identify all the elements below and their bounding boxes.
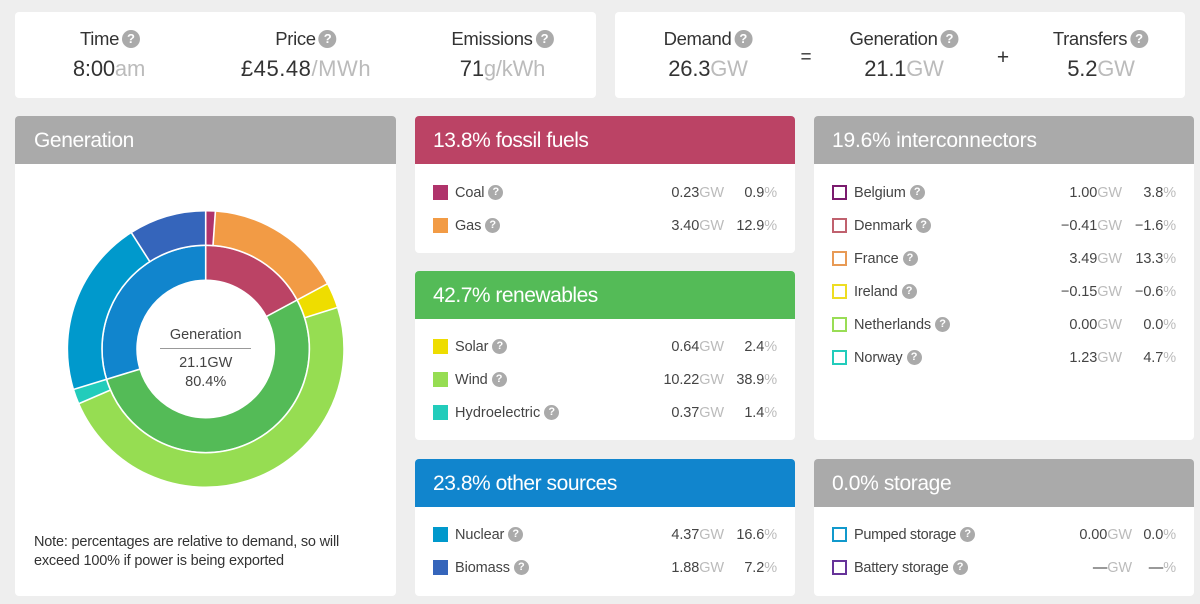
- donut centre text: 21.1GW: [179, 355, 233, 371]
- note: exceed 100% if power is being exported: [34, 553, 284, 569]
- row: coal: Coal: [455, 185, 484, 201]
- row: pumped storage: Pumped storage: [854, 527, 956, 543]
- row: hydroelectric: Hydroelectric: [455, 405, 540, 421]
- row: france: France: [854, 251, 899, 267]
- transfers value: 5.2GW: [1067, 56, 1135, 81]
- row: biomass: [433, 560, 777, 576]
- donut centre text: Generation: [170, 327, 242, 343]
- price label: [275, 28, 336, 49]
- row: hydroelectric: ?: [548, 406, 555, 418]
- row: solar: 2.4%: [744, 339, 777, 355]
- row: france: ?: [907, 252, 913, 264]
- emissions value: 71g/kWh: [460, 56, 545, 81]
- demand label: ?: [739, 31, 747, 46]
- generation label: ?: [946, 31, 953, 46]
- generation label: Generation: [849, 28, 938, 49]
- row: hydroelectric: 0.37GW: [671, 405, 724, 421]
- row: gas: 12.9%: [736, 218, 777, 234]
- time value: 8:00am: [73, 56, 145, 81]
- row: coal: 0.23GW: [671, 185, 724, 201]
- panel: interconnectors: [814, 116, 1194, 440]
- row: biomass: 7.2%: [744, 560, 777, 576]
- row: denmark: ?: [920, 219, 927, 231]
- row: ireland: ?: [906, 285, 912, 297]
- demand value: 26.3GW: [668, 56, 748, 81]
- panel: fossil fuels: [415, 116, 795, 253]
- row: battery storage: —%: [1149, 560, 1176, 576]
- price value: £45.48/MWh: [241, 56, 371, 81]
- panel: generation donut: [15, 116, 396, 596]
- heading: renewables: [415, 271, 795, 319]
- row: ireland: −0.15GW: [1061, 284, 1122, 300]
- row: nuclear: [433, 527, 777, 543]
- transfers label: Transfers: [1053, 28, 1127, 49]
- row: gas: [433, 218, 777, 234]
- heading: fossil fuels: 13.8% fossil fuels: [433, 129, 588, 152]
- heading: generation: [15, 116, 396, 164]
- row: battery storage: ?: [957, 561, 963, 573]
- row: nuclear: Nuclear: [455, 527, 504, 543]
- row: belgium: Belgium: [854, 185, 906, 201]
- donut centre text: [160, 327, 251, 390]
- row: wind: 38.9%: [736, 372, 777, 388]
- row: ireland: [832, 284, 1176, 300]
- row: wind: Wind: [455, 372, 488, 388]
- row: wind: [433, 372, 777, 388]
- row: netherlands: Netherlands: [854, 317, 931, 333]
- row: solar: 0.64GW: [671, 339, 724, 355]
- row: solar: [433, 339, 777, 355]
- price label: Price: [275, 28, 316, 49]
- heading: generation: Generation: [34, 129, 134, 152]
- row: norway: Norway: [854, 350, 903, 366]
- heading: storage: [814, 459, 1194, 507]
- row: norway: ?: [911, 351, 917, 363]
- row: france: 13.3%: [1135, 251, 1176, 267]
- equals sign: =: [800, 47, 812, 68]
- row: norway: 1.23GW: [1069, 350, 1122, 366]
- row: pumped storage: ?: [964, 528, 971, 540]
- row: nuclear: 4.37GW: [671, 527, 724, 543]
- row: pumped storage: 0.00GW: [1079, 527, 1132, 543]
- price label: ?: [324, 31, 332, 46]
- heading: other sources: [415, 459, 795, 507]
- row: nuclear: ?: [512, 528, 519, 540]
- row: gas: 3.40GW: [671, 218, 724, 234]
- panel: other sources: [415, 459, 795, 596]
- row: wind: ?: [496, 373, 502, 385]
- row: gas: Gas: [455, 218, 481, 234]
- row: belgium: 3.8%: [1143, 185, 1176, 201]
- row: belgium: [832, 185, 1176, 201]
- panel: renewables: [415, 271, 795, 440]
- row: netherlands: [832, 317, 1176, 333]
- time label: Time: [80, 28, 119, 49]
- row: coal: 0.9%: [744, 185, 777, 201]
- row: battery storage: Battery storage: [854, 560, 949, 576]
- row: biomass: Biomass: [455, 560, 510, 576]
- row: hydroelectric: [433, 405, 777, 421]
- panel: demand equation: [615, 12, 1185, 98]
- row: biomass: 1.88GW: [671, 560, 724, 576]
- panel: storage: [814, 459, 1194, 596]
- row: wind: 10.22GW: [663, 372, 724, 388]
- row: hydroelectric: 1.4%: [744, 405, 777, 421]
- panel: time, price, emissions: [15, 12, 596, 98]
- row: pumped storage: [832, 527, 1176, 543]
- time label: [80, 28, 140, 49]
- row: denmark: −1.6%: [1135, 218, 1176, 234]
- row: denmark: Denmark: [854, 218, 912, 234]
- emissions label: ?: [541, 31, 549, 46]
- demand label: Demand: [664, 28, 731, 49]
- row: netherlands: 0.00GW: [1069, 317, 1122, 333]
- time label: ?: [127, 31, 135, 46]
- transfers label: ?: [1135, 31, 1143, 46]
- row: norway: [832, 350, 1176, 366]
- row: ireland: −0.6%: [1135, 284, 1176, 300]
- row: biomass: ?: [518, 561, 525, 573]
- heading: interconnectors: 19.6% interconnectors: [832, 129, 1037, 152]
- donut centre text: 80.4%: [185, 374, 226, 390]
- row: denmark: −0.41GW: [1061, 218, 1122, 234]
- row: belgium: ?: [914, 186, 921, 198]
- row: pumped storage: 0.0%: [1143, 527, 1176, 543]
- heading: other sources: 23.8% other sources: [433, 472, 617, 495]
- row: nuclear: 16.6%: [736, 527, 777, 543]
- row: battery storage: [832, 560, 1176, 576]
- row: france: [832, 251, 1176, 267]
- row: solar: ?: [496, 340, 503, 352]
- emissions label: Emissions: [451, 28, 533, 49]
- row: battery storage: —GW: [1093, 560, 1132, 576]
- heading: storage: 0.0% storage: [832, 472, 951, 495]
- plus sign: +: [997, 46, 1009, 69]
- heading: interconnectors: [814, 116, 1194, 164]
- row: norway: 4.7%: [1143, 350, 1176, 366]
- note: [34, 534, 339, 569]
- row: coal: [433, 185, 777, 201]
- heading: fossil fuels: [415, 116, 795, 164]
- row: france: 3.49GW: [1069, 251, 1122, 267]
- generation value: 21.1GW: [864, 56, 944, 81]
- row: denmark: [832, 218, 1176, 234]
- row: ireland: Ireland: [854, 284, 898, 300]
- heading: renewables: 42.7% renewables: [433, 284, 598, 307]
- row: netherlands: ?: [939, 318, 946, 330]
- row: solar: Solar: [455, 339, 488, 355]
- row: gas: ?: [489, 219, 496, 231]
- row: netherlands: 0.0%: [1143, 317, 1176, 333]
- note: Note: percentages are relative to demand, so will: [34, 534, 339, 550]
- row: belgium: 1.00GW: [1069, 185, 1122, 201]
- row: coal: ?: [493, 186, 499, 198]
- donut chart: [68, 212, 344, 486]
